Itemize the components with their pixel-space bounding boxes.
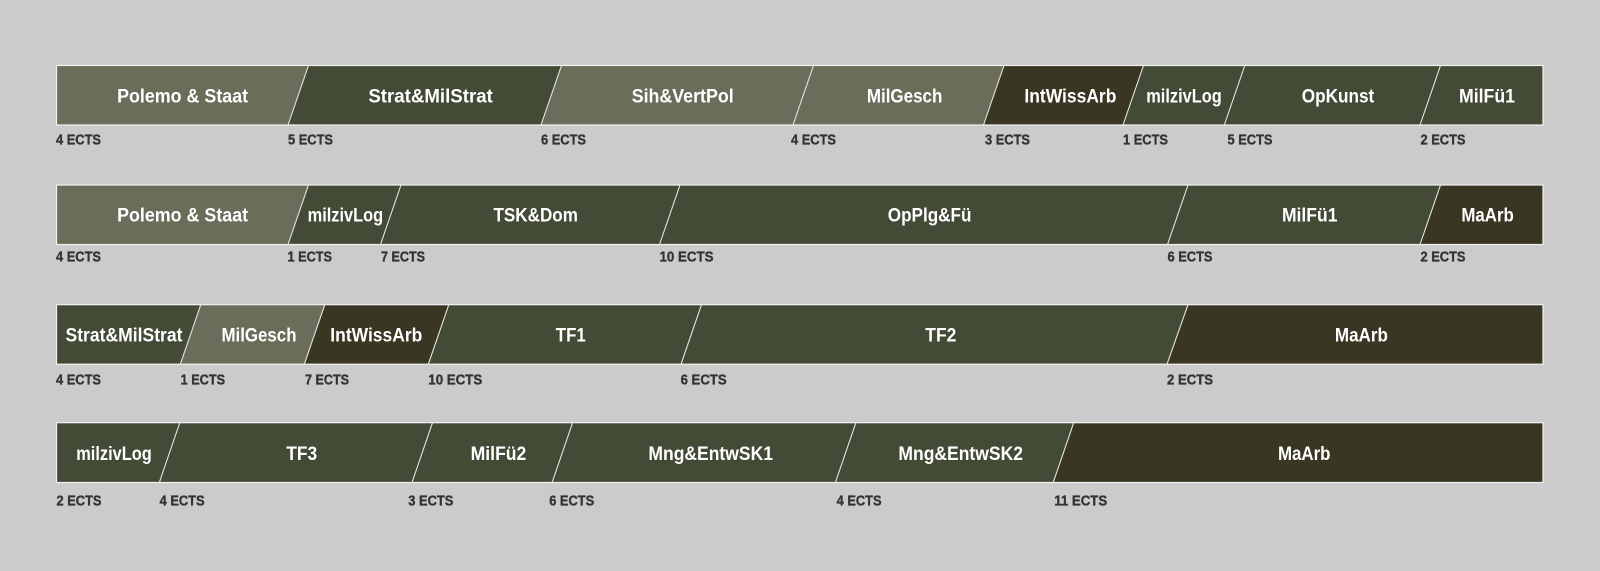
row 1 ECTS labels: 1 ECTS xyxy=(1123,133,1168,149)
row 2 ECTS labels: 7 ECTS xyxy=(381,250,425,266)
segment: MaArb: MaArb xyxy=(1335,325,1388,347)
segment: Sih&VertPol: Sih&VertPol xyxy=(632,86,734,108)
segment: Polemo & Staat: Polemo & Staat xyxy=(117,86,249,108)
row 2 ECTS labels: 1 ECTS xyxy=(288,250,332,266)
row 3 ECTS labels: 2 ECTS xyxy=(1167,373,1213,389)
segment: MilGesch xyxy=(793,66,1004,125)
segment: Polemo & Staat xyxy=(56,66,308,125)
row 3 ECTS labels: 10 ECTS xyxy=(428,373,483,389)
segment: milzivLog: milzivLog xyxy=(76,443,152,465)
segment: TF2: TF2 xyxy=(925,325,956,347)
row 2 xyxy=(56,185,1543,244)
row 2 ECTS labels xyxy=(56,250,1466,266)
segment: Polemo & Staat: Polemo & Staat xyxy=(117,205,249,227)
segment: OpPlg&Fü xyxy=(660,185,1188,244)
row 1 ECTS labels: 4 ECTS xyxy=(56,133,101,149)
row 1 ECTS labels: 5 ECTS xyxy=(288,133,333,149)
segment: IntWissArb xyxy=(984,66,1144,125)
segment: MaArb: MaArb xyxy=(1461,205,1514,227)
row 1 ECTS labels: 2 ECTS xyxy=(1420,133,1466,149)
row 4 ECTS labels: 11 ECTS xyxy=(1054,494,1107,510)
row 2 ECTS labels: 4 ECTS xyxy=(56,250,101,266)
segment: TSK&Dom xyxy=(380,185,680,244)
segment: Sih&VertPol xyxy=(541,66,814,125)
segment: Strat&MilStrat: Strat&MilStrat xyxy=(368,86,493,108)
row 4 ECTS labels xyxy=(56,494,1107,510)
segment: MilFü2 xyxy=(412,423,573,482)
row 4 ECTS labels: 4 ECTS xyxy=(837,494,882,510)
row 4 xyxy=(56,423,1543,482)
segment: IntWissArb xyxy=(304,305,449,364)
segment: Mng&EntwSK1: Mng&EntwSK1 xyxy=(648,443,773,465)
segment: IntWissArb: IntWissArb xyxy=(330,325,422,347)
row 2 ECTS labels: 6 ECTS xyxy=(1168,250,1213,266)
segment: milzivLog xyxy=(56,423,180,482)
row 4 ECTS labels: 3 ECTS xyxy=(408,494,454,510)
row 1 ECTS labels xyxy=(56,133,1466,149)
segment: Strat&MilStrat xyxy=(56,305,201,364)
segment: Strat&MilStrat: Strat&MilStrat xyxy=(66,325,183,347)
row 1 ECTS labels: 5 ECTS xyxy=(1228,133,1273,149)
segment: TF1 xyxy=(428,305,702,364)
row 2 ECTS labels: 2 ECTS xyxy=(1420,250,1466,266)
row 1 ECTS labels: 6 ECTS xyxy=(541,133,586,149)
segment: TF3 xyxy=(159,423,433,482)
segment: TF2 xyxy=(681,305,1188,364)
row 1 ECTS labels: 3 ECTS xyxy=(985,133,1030,149)
segment: milzivLog xyxy=(1123,66,1245,125)
segment: IntWissArb: IntWissArb xyxy=(1024,86,1116,108)
segment: MilGesch: MilGesch xyxy=(867,86,942,108)
segment: MilGesch xyxy=(180,305,325,364)
segment: MilGesch: MilGesch xyxy=(222,325,296,347)
row 3 ECTS labels: 7 ECTS xyxy=(305,373,349,389)
segment: MilFü1 xyxy=(1420,66,1543,125)
segment: milzivLog: milzivLog xyxy=(1146,86,1222,108)
row 3 ECTS labels xyxy=(56,373,1213,389)
segment: TF3: TF3 xyxy=(286,443,317,465)
segment: MaArb xyxy=(1420,185,1543,244)
segment: milzivLog xyxy=(288,185,401,244)
segment: Mng&EntwSK2: Mng&EntwSK2 xyxy=(898,443,1023,465)
segment: Mng&EntwSK2 xyxy=(835,423,1074,482)
segment: Mng&EntwSK1 xyxy=(552,423,856,482)
segment: MilFü1: MilFü1 xyxy=(1282,205,1338,227)
segment: OpPlg&Fü: OpPlg&Fü xyxy=(888,205,971,227)
segment: MilFü1: MilFü1 xyxy=(1459,86,1515,108)
row 2 ECTS labels: 10 ECTS xyxy=(660,250,714,266)
row 1 xyxy=(56,66,1543,125)
row 4 ECTS labels: 2 ECTS xyxy=(56,494,102,510)
row 3 ECTS labels: 6 ECTS xyxy=(681,373,727,389)
row 1 ECTS labels: 4 ECTS xyxy=(791,133,836,149)
segment: TSK&Dom: TSK&Dom xyxy=(494,205,578,227)
segment: TF1: TF1 xyxy=(556,325,586,347)
segment: MaArb xyxy=(1167,305,1543,364)
segment: OpKunst xyxy=(1224,66,1440,125)
row 4 ECTS labels: 4 ECTS xyxy=(160,494,205,510)
segment: Strat&MilStrat xyxy=(288,66,562,125)
segment: OpKunst: OpKunst xyxy=(1302,86,1375,108)
segment: MaArb xyxy=(1053,423,1543,482)
segment: MilFü2: MilFü2 xyxy=(471,443,526,465)
row 3 ECTS labels: 1 ECTS xyxy=(181,373,225,389)
row 3 xyxy=(56,305,1543,364)
row 4 ECTS labels: 6 ECTS xyxy=(549,494,594,510)
segment: MaArb: MaArb xyxy=(1278,443,1331,465)
segment: Polemo & Staat xyxy=(56,185,308,244)
segment: milzivLog: milzivLog xyxy=(308,205,383,227)
segment: MilFü1 xyxy=(1168,185,1440,244)
row 3 ECTS labels: 4 ECTS xyxy=(56,373,101,389)
